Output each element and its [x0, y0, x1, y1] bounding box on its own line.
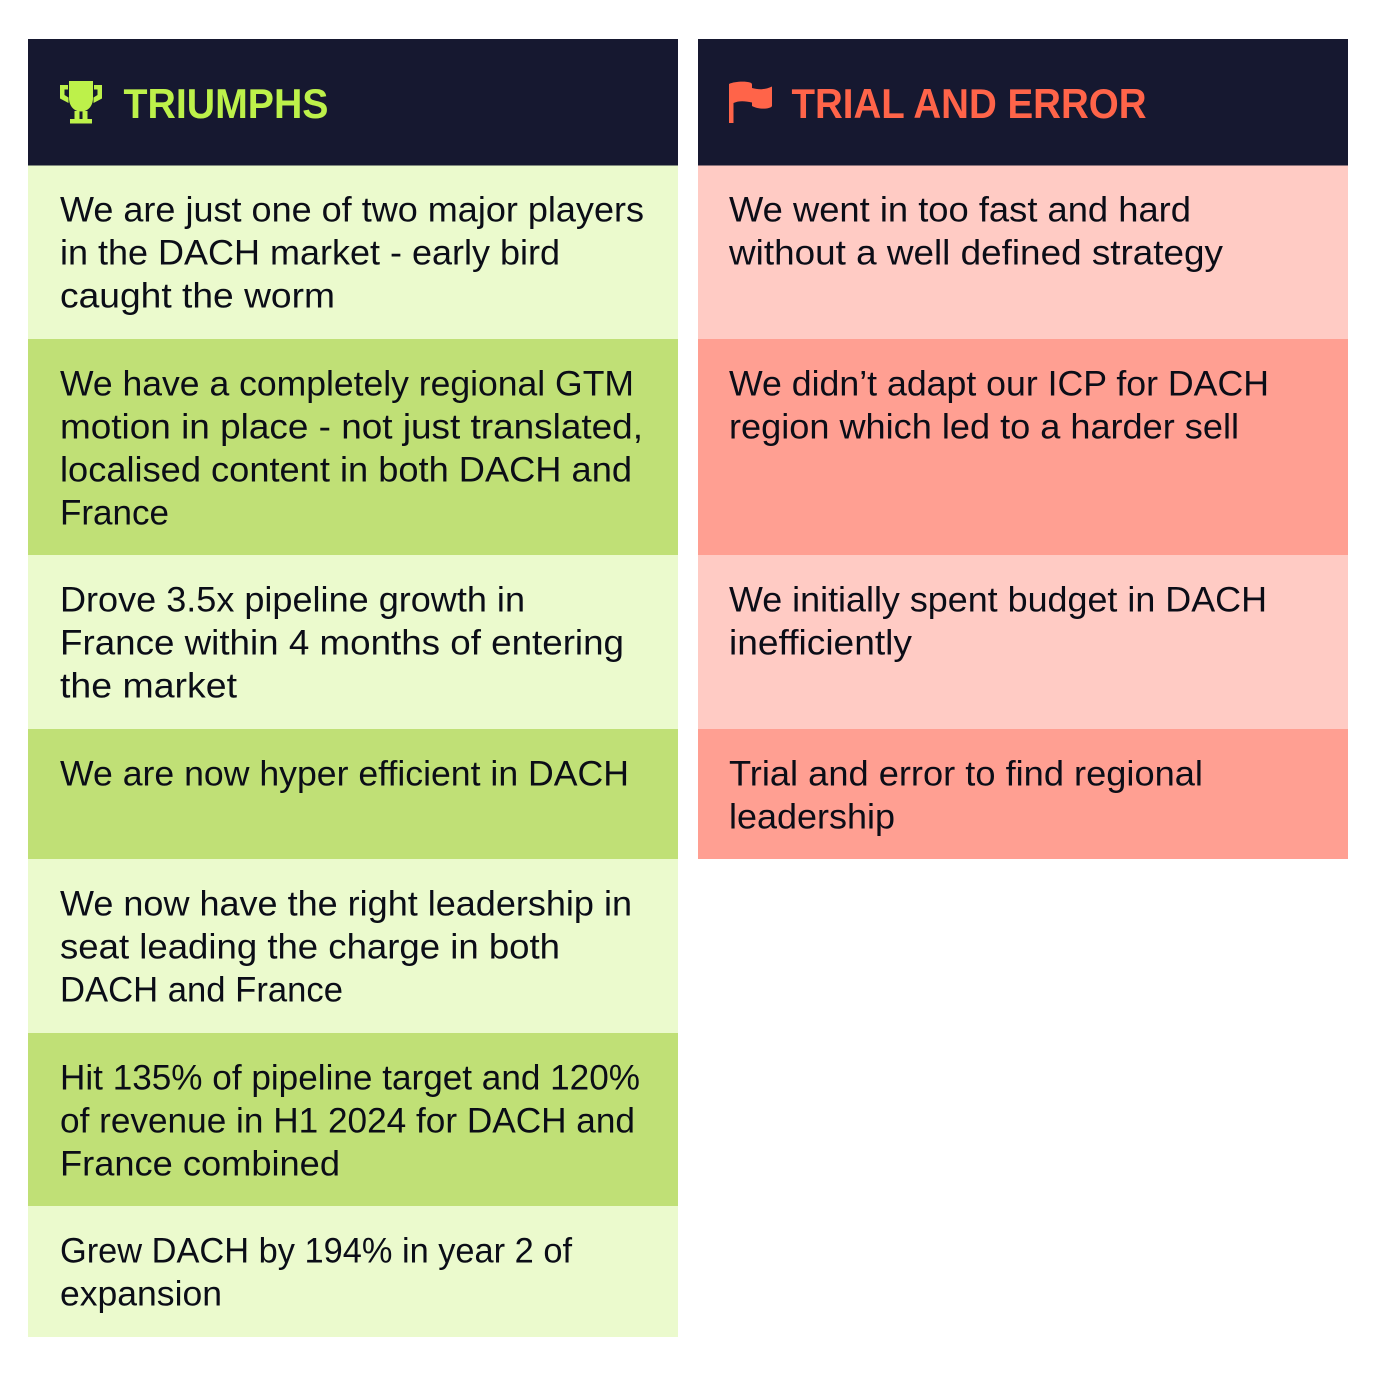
heading: trial and error: TRIAL AND ERROR [792, 80, 1146, 127]
panel: trial and error [698, 39, 1348, 859]
row: hyper efficient [28, 729, 678, 859]
row: early bird: in the DACH market - early bird [60, 232, 560, 272]
row: regional GTM [28, 339, 678, 555]
row: right leadership [28, 859, 678, 1033]
row: regional GTM: We have a completely regional GTM [60, 364, 634, 404]
row: early bird: We are just one of two major players [60, 190, 644, 230]
row: early bird [28, 166, 678, 339]
row: pipeline growth in France: the market [60, 666, 237, 706]
row: hyper efficient: We are now hyper efficient in DACH [60, 754, 629, 794]
row: DACH growth: Grew DACH by 194% in year 2 of [60, 1230, 572, 1270]
row: ICP: region which led to a harder sell [729, 406, 1239, 446]
row: regional GTM: motion in place - not just translated, [60, 406, 643, 446]
row: budget: inefficiently [729, 622, 912, 662]
heading: triumphs: TRIUMPHS [124, 80, 328, 127]
header: trial and error [698, 39, 1348, 166]
row: right leadership: We now have the right leadership in [60, 884, 632, 924]
row: ICP: We didn’t adapt our ICP for DACH [729, 364, 1269, 404]
row: budget: We initially spent budget in DACH [729, 580, 1267, 620]
row: right leadership: seat leading the charge in both [60, 926, 560, 966]
row: pipeline growth in France: France within 4 months of entering [60, 622, 624, 662]
row: regional GTM: France [60, 492, 169, 532]
row: too fast [698, 166, 1348, 339]
row: targets hit: France combined [60, 1144, 340, 1184]
row: regional leadership [698, 729, 1348, 859]
row: too fast: We went in too fast and hard [729, 190, 1191, 230]
row: regional leadership: leadership [729, 796, 895, 836]
row: regional GTM: localised content in both DACH and [60, 450, 632, 490]
icon: flag [729, 82, 772, 123]
row: targets hit: of revenue in H1 2024 for DACH and [60, 1100, 635, 1140]
icon: trophy [60, 81, 102, 124]
row: ICP [698, 339, 1348, 555]
row: early bird: caught the worm [60, 276, 335, 316]
row: right leadership: DACH and France [60, 970, 343, 1010]
row: DACH growth: expansion [60, 1274, 222, 1314]
row: pipeline growth in France: Drove 3.5x pipeline growth in [60, 580, 525, 620]
row: regional leadership: Trial and error to find regional [729, 754, 1203, 794]
row: DACH growth [28, 1206, 678, 1337]
header: triumphs [28, 39, 678, 166]
row: too fast: without a well defined strategy [728, 232, 1223, 272]
row: pipeline growth in France [28, 555, 678, 729]
row: budget [698, 555, 1348, 729]
row: targets hit [28, 1033, 678, 1206]
panel: triumphs [28, 39, 678, 1337]
row: targets hit: Hit 135% of pipeline target and 120% [60, 1058, 640, 1098]
